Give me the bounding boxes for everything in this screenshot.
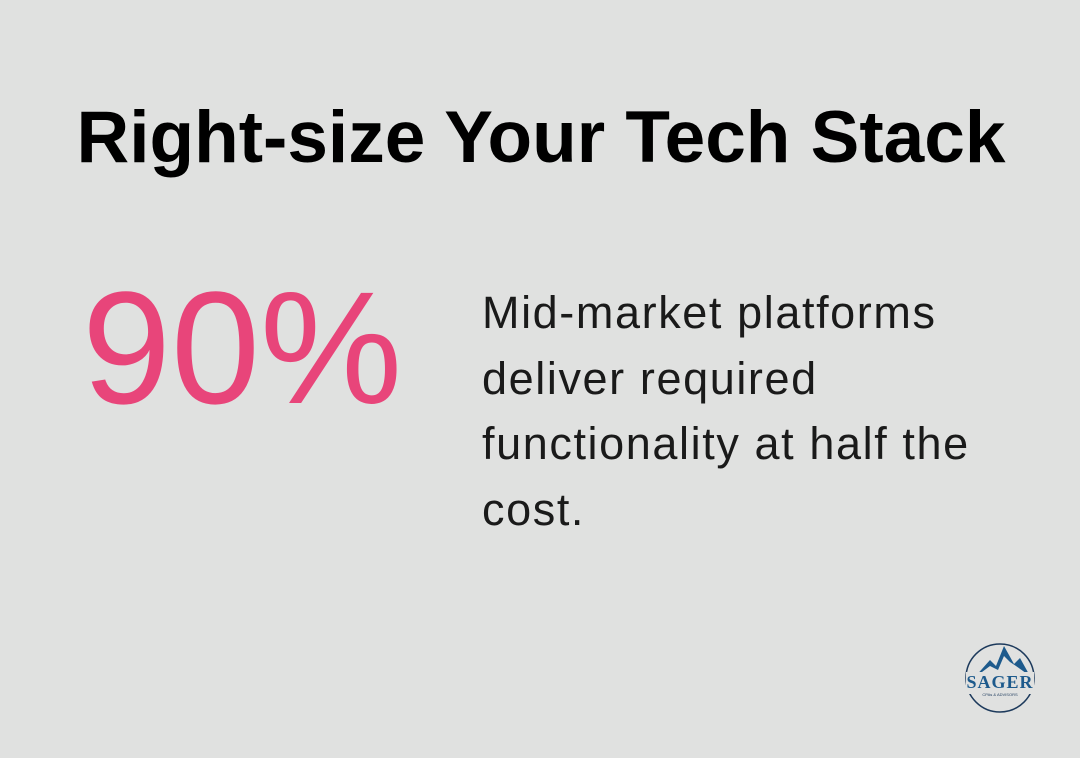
description text (482, 287, 970, 534)
description text: Mid-market platforms (482, 287, 937, 338)
description text: deliver required (482, 352, 818, 404)
logo: Sager: CPAs & ADVISORS (982, 692, 1018, 697)
stat number: 90% (82, 258, 402, 437)
logo: Sager (965, 643, 1035, 713)
logo: Sager: SAGER (966, 672, 1034, 692)
title: Right-size Your Tech Stack (77, 97, 1005, 178)
description text: cost. (482, 484, 585, 534)
description text: functionality at half the (482, 418, 970, 469)
